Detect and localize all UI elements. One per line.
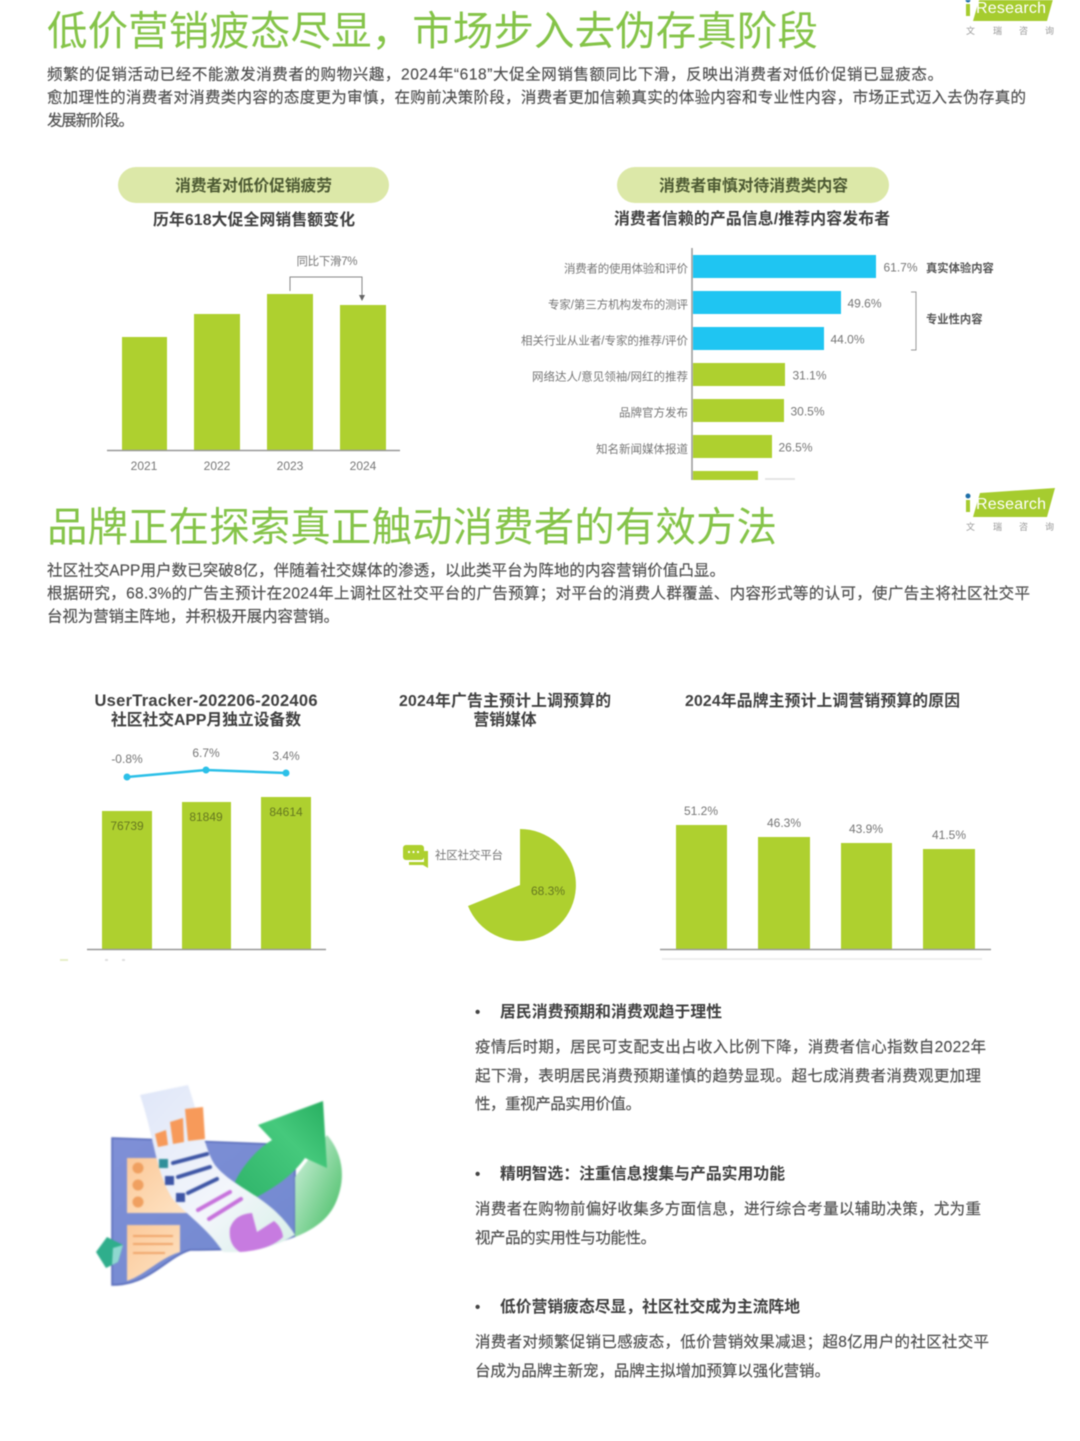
bar chart: trusted publishers: 相关行业从业者/专家的推荐/评价	[521, 334, 688, 348]
chart heading: 618 sales: 历年618大促全网销售额变化	[153, 210, 355, 229]
upper panel	[127, 1158, 187, 1213]
logo: iResearch middle: 咨	[1019, 521, 1028, 532]
bar chart: trusted publishers: 44.0%	[830, 332, 865, 346]
text block: smart choice: 视产品的实用性与功能性。	[475, 1229, 656, 1247]
panel heading: low price fatigue	[118, 167, 389, 203]
bar chart: trusted publishers: 26.5%	[778, 440, 813, 454]
logo: iResearch top: 咨	[1019, 25, 1028, 36]
bar chart: budget reasons: 41.5%	[932, 828, 966, 842]
text block: rational consumption: 居民消费预期和消费观趋于理性	[500, 1002, 722, 1021]
panel heading: cautious consumers	[617, 167, 889, 203]
paper	[140, 1085, 295, 1252]
text block: rational consumption: 疫情后时期，居民可支配支出占收入比例下降，消费者信心指数自2022年	[475, 1038, 986, 1056]
text block: section two intro: 社区社交APP用户数已突破8亿，伴随着社交媒体的渗透，以此类平台为阵地的内容营销价值凸显。	[47, 562, 725, 580]
bar chart: trusted publishers: 真实体验内容	[926, 261, 994, 275]
text block: smart choice	[475, 1164, 981, 1247]
illustration: report and growth arrow	[96, 1085, 342, 1285]
bar chart: budget reasons	[660, 804, 991, 960]
bar chart: trusted publishers	[521, 248, 994, 480]
pie chart: social platforms share: 社区社交平台	[435, 848, 503, 862]
bar and line chart: monthly devices: 76739	[110, 819, 144, 833]
logo: iResearch middle: 瑞	[993, 521, 1002, 532]
swoosh	[295, 1135, 342, 1237]
cube	[96, 1237, 123, 1268]
text block: rational consumption	[475, 1002, 986, 1113]
bar and line chart: monthly devices: 81849	[189, 810, 223, 824]
bar chart: trusted publishers: 专家/第三方机构发布的测评	[548, 298, 688, 312]
text block: rational consumption: •	[475, 1004, 480, 1021]
chart heading: budget media	[399, 691, 611, 729]
bar chart: trusted publishers: 网络达人/意见领袖/网红的推荐	[532, 370, 688, 384]
bar chart: budget reasons: 46.3%	[767, 816, 801, 830]
paper list	[159, 1154, 241, 1219]
icon: chat bubbles	[403, 845, 428, 868]
logo: iResearch middle: Research	[976, 496, 1046, 513]
text block: section one intro: 发展新阶段。	[47, 112, 134, 130]
pie chart: social platforms share: 68.3%	[531, 884, 565, 898]
text block: rational consumption: 性，重视产品实用价值。	[475, 1095, 641, 1113]
text block: smart choice: •	[475, 1166, 480, 1183]
bar and line chart: monthly devices: 84614	[269, 805, 303, 819]
text block: smart choice: 精明智选：注重信息搜集与产品实用功能	[500, 1164, 785, 1183]
lower panel	[127, 1225, 180, 1281]
text block: social as main arena: 台成为品牌主新宠，品牌主拟增加预算以强化营销。	[475, 1361, 830, 1380]
chart heading: budget media: 营销媒体	[473, 711, 537, 729]
chart heading: monthly devices: UserTracker-202206-202406	[94, 692, 318, 710]
bar chart: 618 sales by year: 2021	[131, 459, 158, 473]
text block: section one intro: 愈加理性的消费者对消费类内容的态度更为审慎，在购前决策阶段，消费者更加信赖真实的体验内容和专业性内容，市场正式迈入去伪存真的	[47, 88, 1026, 106]
text block: social as main arena: 低价营销疲态尽显，社区社交成为主流阵地	[500, 1297, 800, 1316]
text block: rational consumption: 起下滑，表明居民消费预期谨慎的趋势显现。超七成消费者消费观更加理	[475, 1067, 981, 1085]
chart heading: budget media: 2024年广告主预计上调预算的	[399, 691, 611, 710]
paper bars	[155, 1107, 205, 1147]
title: section one: 低价营销疲态尽显，市场步入去伪存真阶段	[47, 8, 818, 54]
bar chart: trusted publishers: 品牌官方发布	[619, 406, 688, 420]
logo: iResearch top: Research	[976, 0, 1046, 17]
bar chart: 618 sales by year: 2024	[350, 459, 377, 473]
logo: iResearch middle: 询	[1045, 521, 1054, 532]
logo: iResearch top: 询	[1045, 25, 1054, 36]
text block: smart choice: 消费者在购物前偏好收集多方面信息，进行综合考量以辅助决策，尤为重	[475, 1200, 981, 1218]
chart heading: monthly devices: 社区社交APP月独立设备数	[111, 710, 301, 729]
bar and line chart: monthly devices: 3.4%	[272, 749, 300, 763]
chart heading: budget reasons: 2024年品牌主预计上调营销预算的原因	[685, 691, 960, 710]
chart heading: trusted publishers: 消费者信赖的产品信息/推荐内容发布者	[614, 209, 890, 228]
text block: section one intro	[47, 64, 1026, 130]
bar chart: budget reasons: 43.9%	[849, 822, 883, 836]
bar chart: trusted publishers: 知名新闻媒体报道	[596, 442, 688, 456]
bar chart: trusted publishers: 消费者的使用体验和评价	[564, 262, 688, 276]
logo: iResearch top	[966, 0, 1055, 36]
panel heading: cautious consumers: 消费者审慎对待消费类内容	[659, 176, 848, 195]
bar chart: 618 sales by year: 2023	[277, 459, 304, 473]
bar chart: trusted publishers: 30.5%	[790, 404, 825, 418]
logo: iResearch top: 文	[966, 25, 975, 36]
text block: section two intro: 台视为营销主阵地，并积极开展内容营销。	[47, 608, 339, 626]
logo: iResearch top: 瑞	[993, 25, 1002, 36]
arrow	[235, 1101, 327, 1198]
text block: section two intro: 根据研究，68.3%的广告主预计在2024年上调社区社交平台的广告预算；对平台的消费人群覆盖、内容形式等的认可，使广告主将社区社交平	[47, 584, 1030, 602]
logo: iResearch middle	[966, 488, 1055, 532]
text block: section one intro: 频繁的促销活动已经不能激发消费者的购物兴趣，2024年“618”大促全网销售额同比下滑，反映出消费者对低价促销已显疲态。	[47, 64, 943, 84]
panel heading: low price fatigue: 消费者对低价促销疲劳	[175, 176, 332, 195]
bar chart: trusted publishers: 31.1%	[792, 368, 827, 382]
text block: social as main arena: 消费者对频繁促销已感疲态，低价营销效果减退；超8亿用户的社区社交平	[475, 1332, 989, 1351]
chart heading: monthly devices	[94, 692, 318, 729]
bar chart: budget reasons: 51.2%	[684, 804, 718, 818]
bar and line chart: monthly devices: -0.8%	[111, 752, 143, 766]
logo: iResearch middle: 文	[966, 521, 975, 532]
bar chart: trusted publishers: 61.7%	[884, 260, 918, 274]
paper pie	[230, 1213, 283, 1252]
bar chart: trusted publishers: 49.6%	[848, 296, 882, 310]
bar chart: 618 sales by year: 2022	[204, 459, 231, 473]
text block: section two intro	[47, 562, 1030, 626]
bar chart: 618 sales by year: 同比下滑7%	[296, 255, 358, 268]
bar and line chart: monthly devices	[60, 746, 326, 961]
bar and line chart: monthly devices: 6.7%	[192, 746, 220, 760]
text block: social as main arena	[475, 1297, 989, 1380]
monitor	[112, 1138, 295, 1285]
bar chart: trusted publishers: 专业性内容	[926, 312, 982, 326]
bar chart: 618 sales by year	[107, 255, 400, 473]
title: section two: 品牌正在探索真正触动消费者的有效方法	[47, 504, 777, 550]
pie chart: social platforms share	[403, 829, 576, 941]
text block: social as main arena: •	[475, 1299, 480, 1316]
